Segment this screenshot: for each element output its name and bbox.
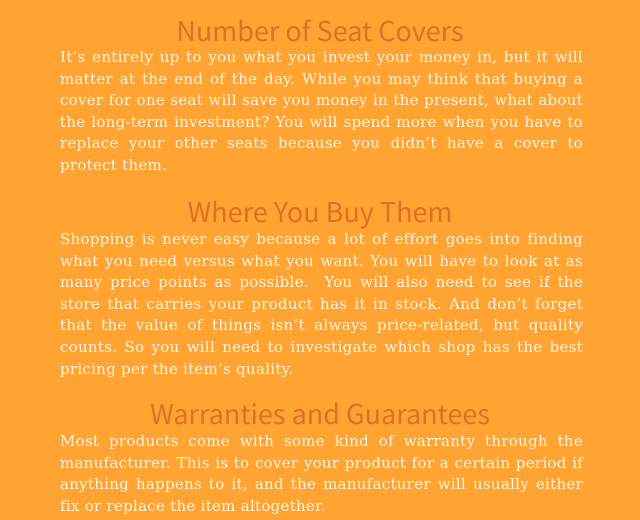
text block: number of seat covers: replace your other seats because you didn’t have a cover to [60, 134, 583, 152]
text block: number of seat covers: protect them. [60, 156, 167, 174]
text block: where you buy them: that the value of things isn’t always price-related, but quality [60, 316, 583, 334]
text block: number of seat covers [60, 48, 583, 174]
text block: warranties and guarantees: anything happens to it, and the manufacturer will usually either [60, 475, 583, 493]
text block: number of seat covers: the long-term investment? You will spend more when you have to [60, 113, 583, 131]
text block: where you buy them: counts. So you will need to investigate which shop has the best [60, 338, 583, 356]
text block: warranties and guarantees [60, 432, 584, 515]
text block: where you buy them: store that carries your product has it in stock. And don’t forget [60, 295, 583, 313]
text block: where you buy them [60, 230, 583, 378]
text block: where you buy them: Shopping is never easy because a lot of effort goes into finding [60, 230, 583, 248]
text block: number of seat covers: cover for one seat will save you money in the present, what about [60, 91, 583, 109]
text block: warranties and guarantees: fix or replace the item altogether. [60, 497, 326, 515]
text block: where you buy them: what you need versus what you want. You will have to look at as [60, 252, 583, 270]
text block: warranties and guarantees: Most products come with some kind of warranty through the [60, 432, 583, 450]
text block: number of seat covers: matter at the end of the day. While you may think that buying a [60, 70, 583, 88]
heading: number of seat covers: Number of Seat Covers [176, 10, 464, 49]
heading: warranties and guarantees: Warranties and Guarantees [150, 393, 490, 432]
text block: where you buy them: many price points as possible. You will also need to see if the [60, 273, 583, 291]
text block: number of seat covers: It’s entirely up to you what you invest your money in, but it will [60, 48, 583, 66]
heading: where you buy them: Where You Buy Them [188, 191, 452, 230]
text block: warranties and guarantees: manufacturer. This is to cover your product for a certain period if [60, 454, 583, 472]
text block: where you buy them: pricing per the item’s quality. [60, 360, 293, 378]
